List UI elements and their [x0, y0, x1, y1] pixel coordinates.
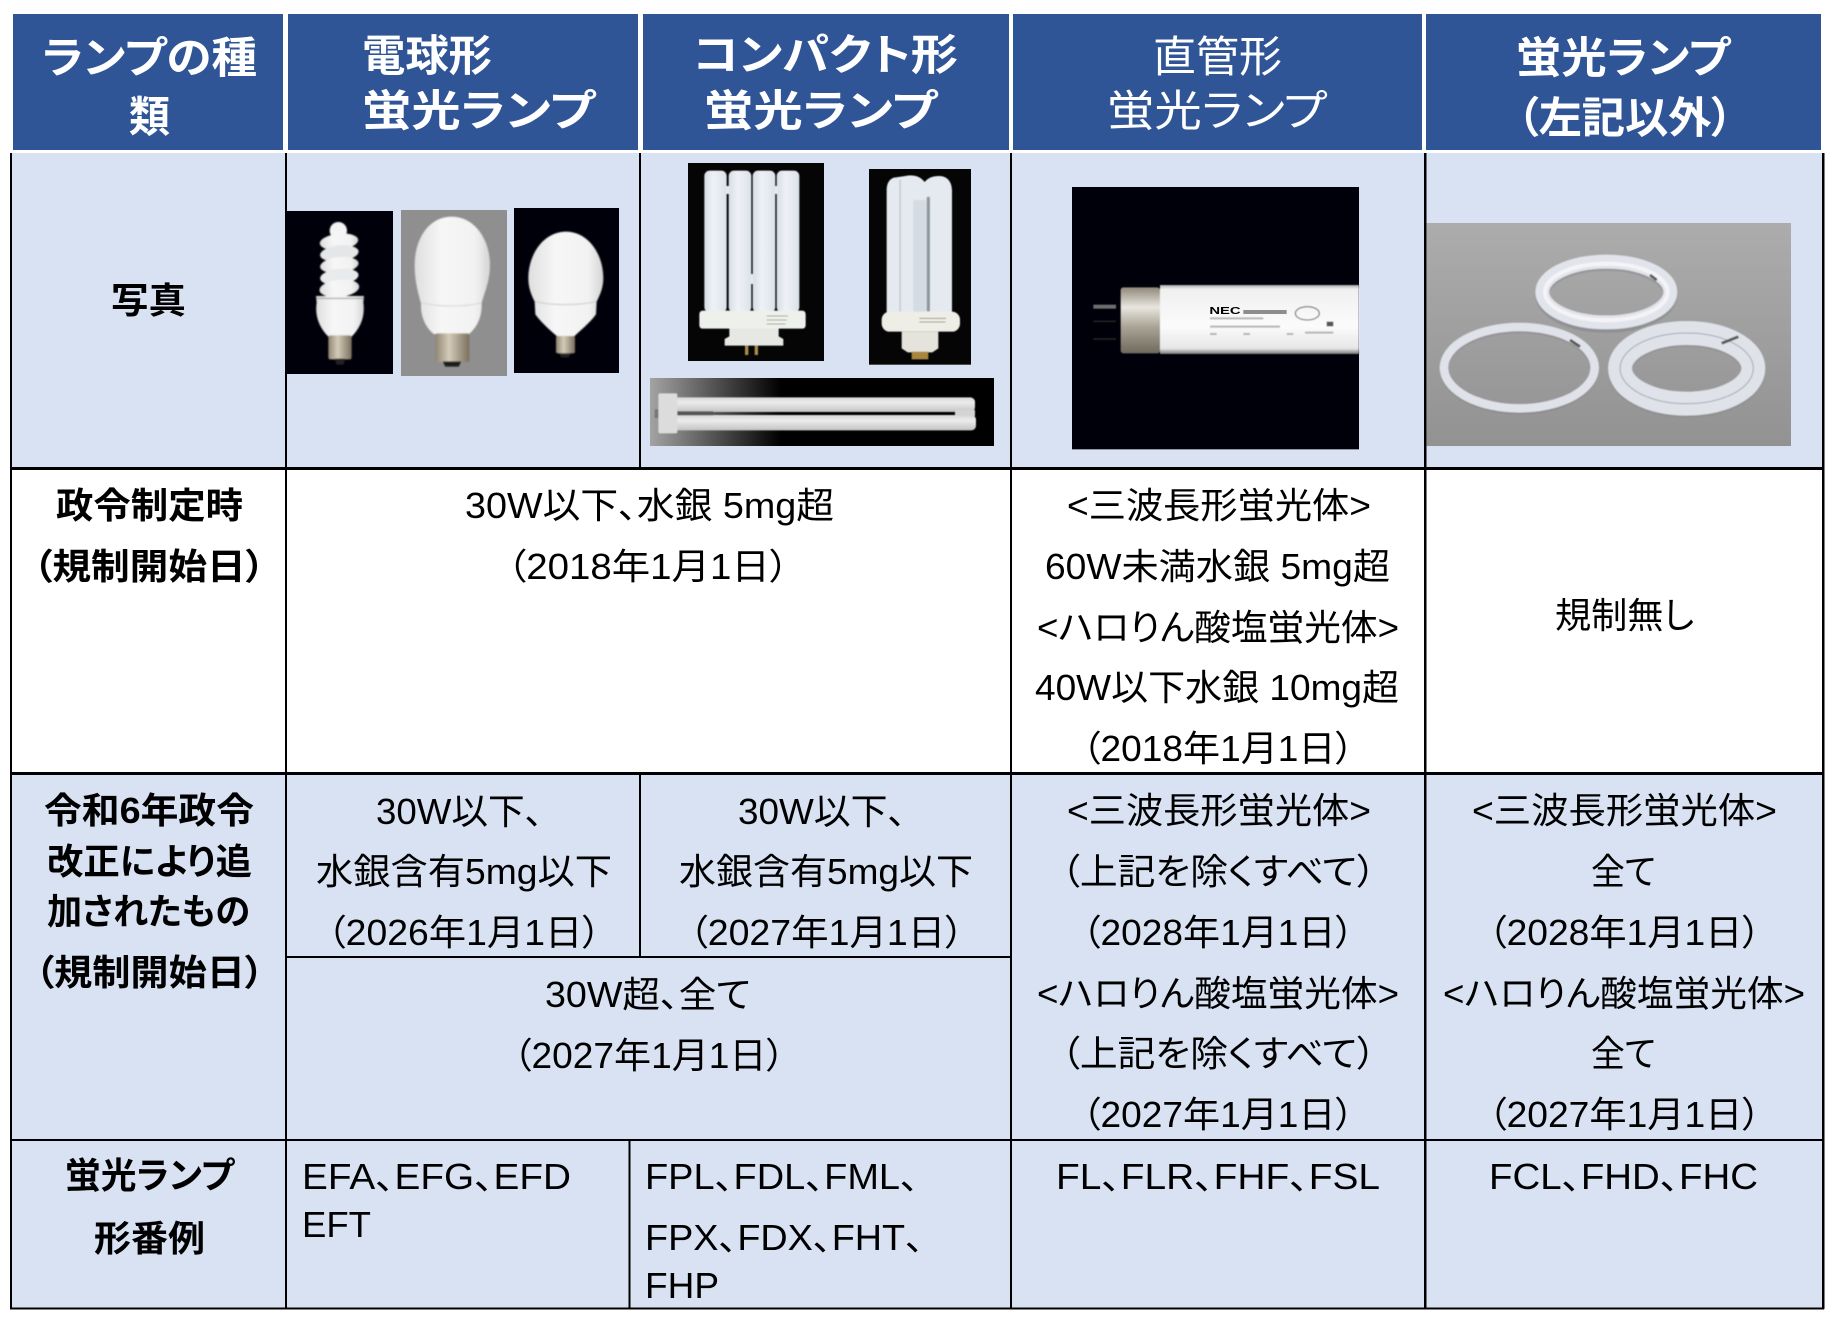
- cell: over 30W: [513, 974, 785, 1076]
- photo: straight tube lamp: [1072, 187, 1359, 449]
- header: other fluorescent lamps: 蛍光ランプ: [1516, 35, 1732, 83]
- cell: other lamps amendment: 全て: [1591, 1033, 1656, 1074]
- photo: compact lamps: [650, 163, 994, 446]
- photo: bulb type lamps: [285, 208, 619, 376]
- cell: other lamps amendment: [1443, 790, 1805, 1135]
- photo: twin bridge compact lamp: [869, 169, 971, 365]
- row: regulation at enactment: [33, 485, 1694, 769]
- row label: amendment: 加されたもの: [47, 891, 250, 932]
- photo: spiral bulb: [285, 211, 393, 374]
- row label: model numbers: 形番例: [94, 1218, 205, 1259]
- header: compact type: [643, 14, 1009, 150]
- cell: straight tube: （2018年1月1日）: [1082, 728, 1354, 769]
- cell: bulb model numbers: EFT: [302, 1204, 371, 1245]
- cell: other lamps amendment: <ハロりん酸塩蛍光体>: [1443, 973, 1805, 1014]
- cell: straight tube amendment: （上記を除くすべて）: [1061, 1033, 1376, 1074]
- header: straight tube type: 直管形: [1153, 34, 1282, 82]
- header: lamp type: 類: [129, 94, 170, 142]
- cell: compact model numbers: FHP: [645, 1265, 719, 1306]
- cell: other lamps amendment: 全て: [1591, 851, 1656, 892]
- cell: other lamps amendment: <三波長形蛍光体>: [1472, 790, 1777, 831]
- row label: enactment: 政令制定時: [56, 485, 243, 526]
- header: straight tube type: 蛍光ランプ: [1107, 88, 1328, 136]
- photo: four tube compact lamp: [688, 163, 824, 361]
- label on tube: NEC: [1209, 306, 1241, 317]
- cell: bulb model numbers: [302, 1156, 571, 1245]
- cell: straight tube amendment: （2028年1月1日）: [1082, 912, 1354, 953]
- row label: amendment: [35, 790, 264, 993]
- cell: compact up to 30W: （2027年1月1日）: [689, 912, 964, 953]
- cell: bulb and compact: 30W以下、水銀 5mg超: [465, 485, 834, 526]
- cell: bulb up to 30W: （2026年1月1日）: [327, 912, 601, 953]
- cell: straight tube: <三波長形蛍光体>: [1067, 485, 1371, 526]
- cell: compact up to 30W: 30W以下、: [738, 791, 906, 832]
- cell: other lamps amendment: （2028年1月1日）: [1488, 912, 1761, 953]
- row label: amendment: 令和6年政令: [44, 790, 254, 831]
- row label: enactment: （規制開始日）: [33, 546, 265, 587]
- cell: over 30W: （2027年1月1日）: [513, 1035, 785, 1076]
- cell: straight tube: [1035, 485, 1399, 769]
- header: bulb type: 蛍光ランプ: [362, 88, 597, 136]
- cell: straight tube: <ハロりん酸塩蛍光体>: [1037, 607, 1399, 648]
- row label: enactment: [33, 485, 265, 587]
- cell: straight tube amendment: （2027年1月1日）: [1082, 1094, 1354, 1135]
- cell: straight tube amendment: <三波長形蛍光体>: [1067, 790, 1371, 831]
- cell: compact up to 30W: [679, 791, 973, 953]
- cell: straight tube: 40W以下水銀 10mg超: [1035, 667, 1399, 708]
- cell: straight tube model numbers: FL、FLR、FHF、FSL: [1056, 1156, 1380, 1197]
- header: lamp type: ランプの種: [42, 35, 257, 83]
- header: bulb type: 電球形: [362, 33, 492, 81]
- cell: compact up to 30W: 水銀含有5mg以下: [679, 851, 973, 892]
- cell: compact model numbers: FPL、FDL、FML、: [645, 1156, 919, 1197]
- header: other fluorescent lamps: [1426, 14, 1821, 150]
- photo: long twin tube lamp: [650, 378, 994, 446]
- header: straight tube type: [1013, 14, 1422, 150]
- photo: globe bulb: [514, 208, 619, 373]
- row: model number examples: [65, 1155, 1758, 1306]
- photo: circular lamps: [1427, 223, 1791, 446]
- header: other fluorescent lamps: （左記以外）: [1517, 95, 1733, 143]
- header: lamp type: [13, 14, 283, 150]
- header: compact type: コンパクト形: [693, 32, 958, 80]
- cell: bulb and compact: （2018年1月1日）: [507, 546, 789, 587]
- row label: photo: 写真: [111, 280, 186, 321]
- row label: amendment: 改正により追: [47, 841, 252, 882]
- cell: straight tube: 60W未満水銀 5mg超: [1045, 546, 1390, 587]
- row: photos: [111, 163, 1791, 449]
- cell: bulb and compact: [465, 485, 834, 587]
- cell: other model numbers: FCL、FHD、FHC: [1489, 1156, 1758, 1197]
- row label: amendment: （規制開始日）: [35, 952, 264, 993]
- cell: compact model numbers: [645, 1156, 924, 1306]
- cell: bulb model numbers: EFA、EFG、EFD: [302, 1156, 571, 1197]
- header: compact type: 蛍光ランプ: [704, 88, 939, 136]
- cell: over 30W: 30W超、全て: [545, 974, 751, 1015]
- cell: bulb up to 30W: 30W以下、: [376, 791, 543, 832]
- cell: other lamps amendment: （2027年1月1日）: [1488, 1094, 1761, 1135]
- cell: bulb up to 30W: [316, 791, 612, 953]
- cell: straight tube amendment: （上記を除くすべて）: [1061, 851, 1376, 892]
- header: bulb type: [288, 14, 638, 150]
- row label: model numbers: [65, 1155, 236, 1259]
- cell: no regulation: 規制無し: [1555, 595, 1694, 636]
- header row: [13, 14, 1821, 150]
- row label: model numbers: 蛍光ランプ: [65, 1155, 236, 1196]
- cell: bulb up to 30W: 水銀含有5mg以下: [316, 851, 612, 892]
- cell: straight tube amendment: <ハロりん酸塩蛍光体>: [1037, 973, 1399, 1014]
- photo: A-shape bulb: [401, 210, 507, 376]
- row: added by 2024 amendment: [35, 790, 1805, 1135]
- cell: compact model numbers: FPX、FDX、FHT、: [645, 1217, 924, 1258]
- cell: straight tube amendment: [1037, 790, 1399, 1135]
